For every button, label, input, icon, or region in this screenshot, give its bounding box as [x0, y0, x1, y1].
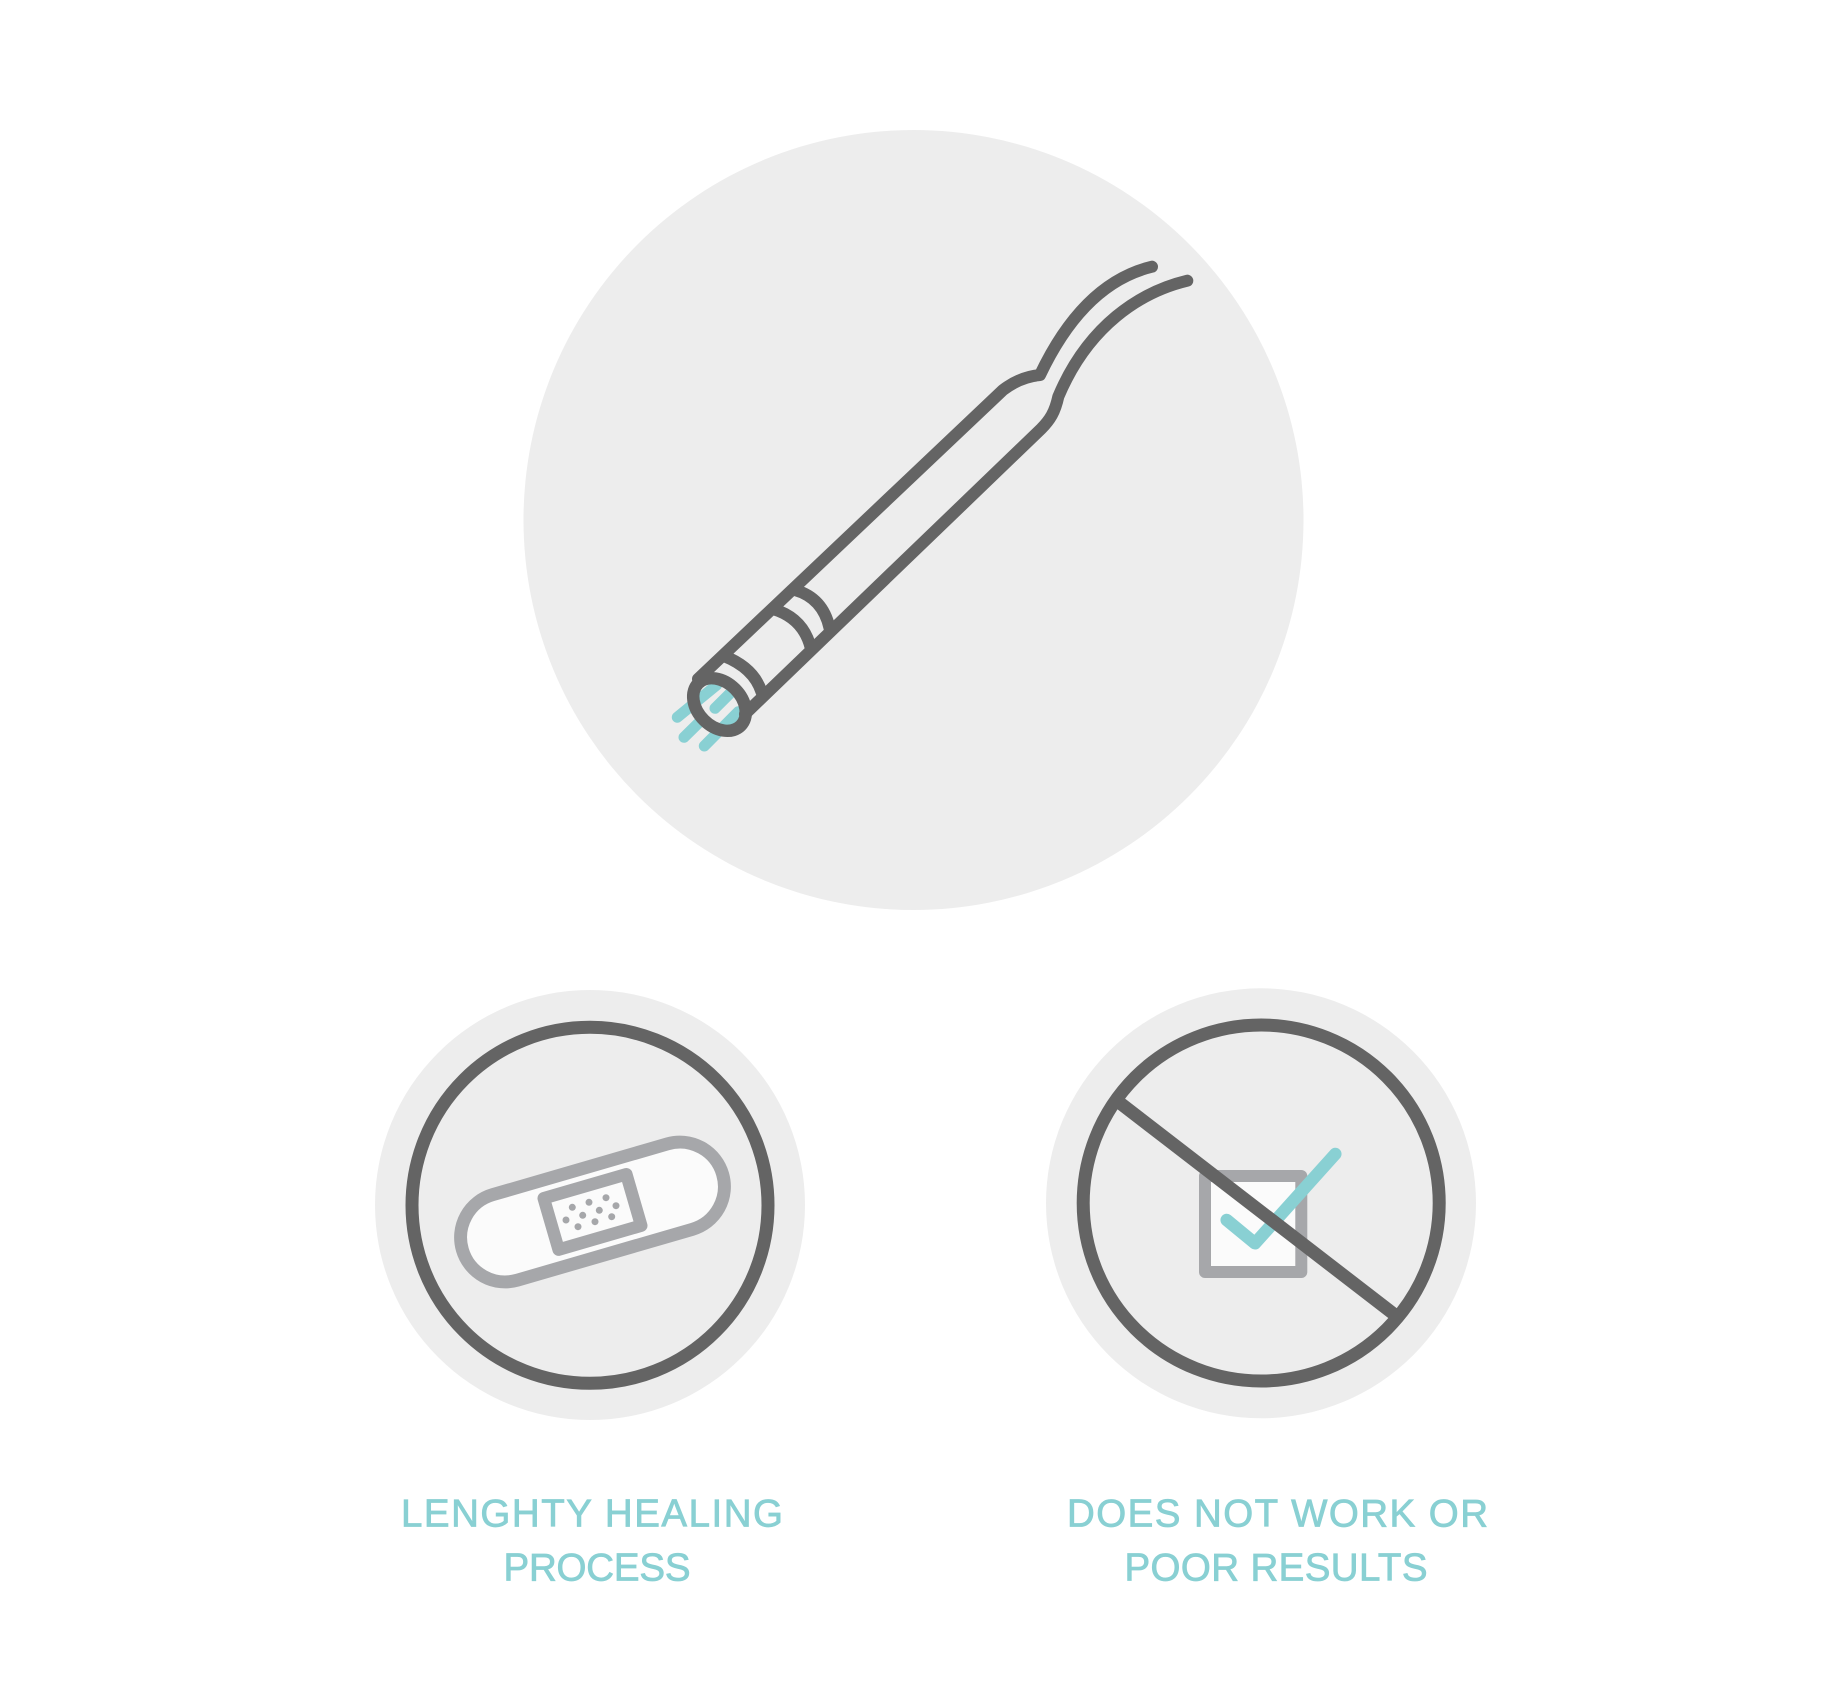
main background circle	[524, 130, 1304, 910]
check mark	[1227, 1154, 1335, 1243]
left background circle	[375, 990, 805, 1420]
right caption	[1067, 1492, 1488, 1590]
right caption: DOES NOT WORK OR	[1067, 1492, 1488, 1536]
icon: tweezers	[683, 267, 1187, 741]
right caption: POOR RESULTS	[1124, 1546, 1428, 1590]
icon: teal hairs at tweezers tip	[677, 685, 738, 746]
bandage dots	[562, 1194, 620, 1230]
left caption	[401, 1492, 783, 1590]
right background circle	[1046, 988, 1476, 1418]
prohibition slash	[1118, 1102, 1395, 1315]
panel: does not work icon	[1046, 988, 1476, 1418]
left caption: PROCESS	[504, 1546, 690, 1590]
panel: lengthy healing process icon	[375, 990, 805, 1420]
checkbox	[1205, 1176, 1301, 1272]
icon: adhesive bandage	[450, 1131, 735, 1293]
left caption: LENGHTY HEALING	[401, 1492, 783, 1536]
left ring	[412, 1027, 768, 1383]
right ring	[1083, 1025, 1439, 1381]
panel: tweezers illustration	[524, 130, 1304, 910]
